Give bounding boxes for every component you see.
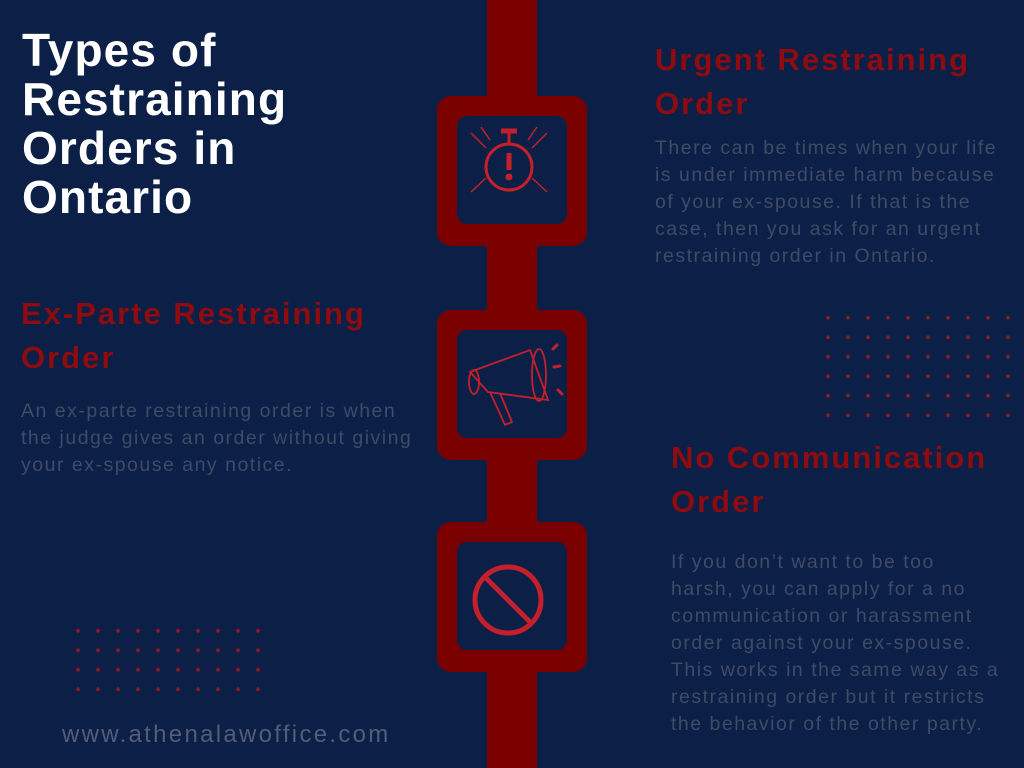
heading: ex-parte	[21, 296, 366, 375]
icon box: stopwatch	[437, 96, 587, 246]
text: no communication: order against your ex-spouse.	[671, 632, 972, 654]
title	[22, 24, 287, 223]
text: urgent: There can be times when your life	[655, 137, 997, 159]
text: urgent	[655, 137, 997, 267]
text: no communication: harsh, you can apply for a no	[671, 578, 966, 600]
text: ex-parte	[21, 400, 412, 476]
text: ex-parte: An ex-parte restraining order is when	[21, 400, 396, 422]
heading: urgent: Urgent Restraining	[655, 42, 970, 77]
text: urgent: restraining order in Ontario.	[655, 245, 936, 267]
text: no communication: communication or harassment	[671, 605, 973, 627]
text: no communication	[671, 551, 999, 735]
title: Restraining	[22, 73, 287, 125]
text: no communication: This works in the same way as a	[671, 659, 999, 681]
heading: no communication	[671, 440, 987, 519]
dot grid right	[826, 316, 1010, 418]
text: urgent: case, then you ask for an urgent	[655, 218, 982, 240]
heading: ex-parte: Order	[21, 340, 115, 375]
title: Orders in	[22, 122, 236, 174]
heading: no communication: Order	[671, 484, 765, 519]
text: urgent: of your ex-spouse. If that is the	[655, 191, 971, 213]
heading: ex-parte: Ex-Parte Restraining	[21, 296, 366, 331]
heading: urgent	[655, 42, 970, 121]
text: ex-parte: the judge gives an order without giving	[21, 427, 412, 449]
text: ex-parte: your ex-spouse any notice.	[21, 454, 293, 476]
text: no communication: the behavior of the other party.	[671, 713, 983, 735]
icon box: prohibited	[437, 522, 587, 672]
title: Ontario	[22, 171, 193, 223]
icon box: megaphone	[437, 310, 587, 460]
text: urgent: is under immediate harm because	[655, 164, 995, 186]
footer url: www.athenalawoffice.com	[62, 721, 391, 748]
text: no communication: If you don’t want to be too	[671, 551, 935, 573]
text: no communication: restraining order but it restricts	[671, 686, 985, 708]
dot grid left	[76, 629, 264, 695]
heading: urgent: Order	[655, 86, 749, 121]
title: Types of	[22, 24, 217, 76]
heading: no communication: No Communication	[671, 440, 987, 475]
